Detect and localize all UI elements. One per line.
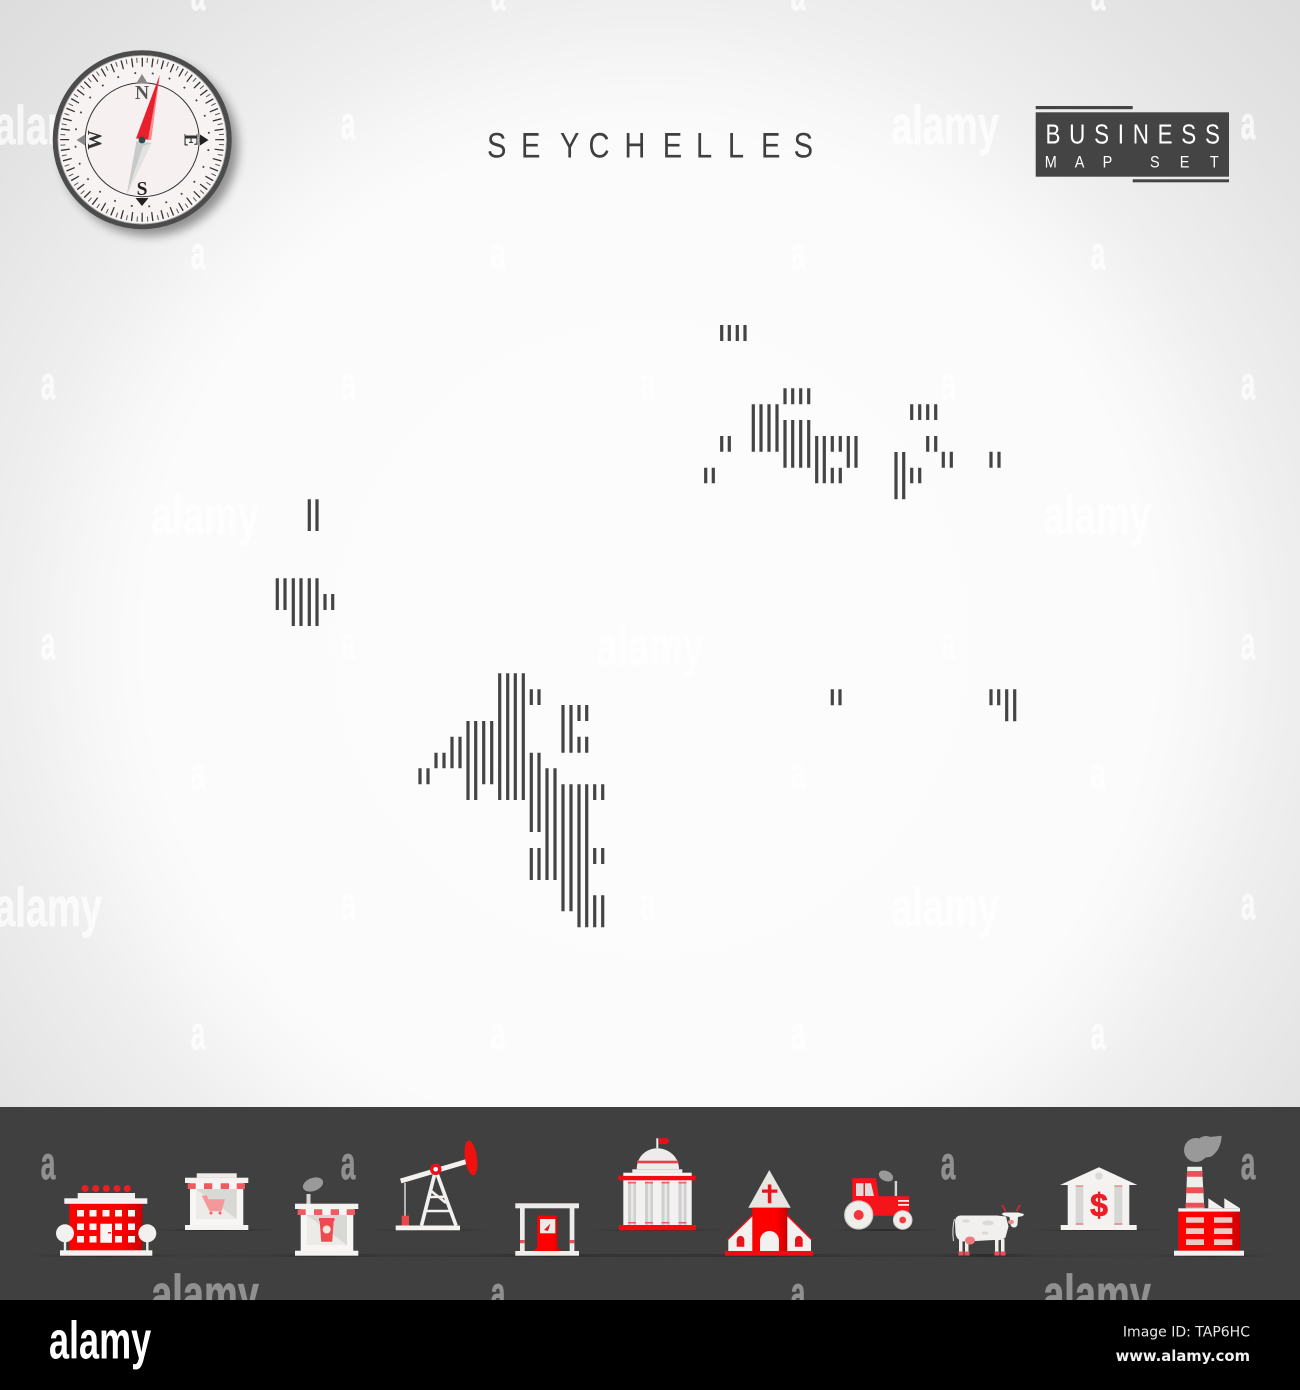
islands: Mahe group north	[706, 388, 856, 483]
compass letters: N	[135, 83, 149, 104]
watermarks on light background: a	[791, 1007, 806, 1059]
watermarks on light background: a	[1241, 877, 1256, 929]
icon: oil pump	[396, 1140, 479, 1230]
icon: factory	[1174, 1136, 1244, 1256]
compass letters: S	[137, 179, 148, 200]
title: SEYCHELLES	[487, 126, 813, 165]
watermarks on dark band: a	[341, 1137, 356, 1189]
watermarks on light background: a	[1091, 1007, 1106, 1059]
watermarks on dark band: a	[1241, 1137, 1256, 1189]
watermarks on light background: a	[1241, 97, 1256, 149]
watermarks on light background: a	[341, 877, 356, 929]
watermarks on dark band: a	[491, 1267, 506, 1319]
black attribution strip	[0, 1300, 1300, 1390]
watermarks on light background: alamy	[891, 877, 999, 939]
watermarks on light background: a	[941, 617, 956, 669]
icon row	[56, 1136, 1244, 1256]
watermarks on light background: a	[491, 227, 506, 279]
watermarks on light background: a	[341, 357, 356, 409]
watermarks on light background: alamy	[1043, 485, 1151, 547]
watermarks on light background: a	[791, 227, 806, 279]
island: northern islet	[722, 325, 745, 341]
compass cardinal triangles	[76, 74, 208, 206]
watermarks on dark band: a	[41, 1137, 56, 1189]
watermarks on light background: a	[191, 1007, 206, 1059]
icon: coffee shop	[295, 1175, 358, 1256]
watermarks on light background	[0, 0, 1256, 1059]
islands: western group	[277, 499, 333, 626]
watermarks on light background: a	[491, 747, 506, 799]
footer dark band	[0, 1107, 1300, 1300]
striped map of Seychelles	[277, 325, 1015, 927]
watermarks on light background: a	[1241, 617, 1256, 669]
watermarks on light background: a	[41, 617, 56, 669]
badge subheading: MAPSET	[1045, 153, 1219, 172]
watermarks on light background: alamy	[891, 95, 999, 157]
islands: north-east group	[896, 404, 999, 499]
watermarks on light background: a	[641, 357, 656, 409]
icon: tractor	[845, 1168, 912, 1229]
watermarks on light background: a	[191, 747, 206, 799]
watermarks on light background: alamy	[596, 616, 704, 678]
watermarks on light background: a	[341, 617, 356, 669]
watermarks on light background: a	[41, 357, 56, 409]
watermarks on light background: a	[1091, 747, 1106, 799]
background	[0, 0, 1300, 1107]
icon: gas station	[515, 1203, 579, 1256]
watermarks on light background: alamy	[151, 485, 259, 547]
watermarks on light background: a	[491, 1007, 506, 1059]
watermarks on light background: a	[1241, 357, 1256, 409]
icon: government building	[618, 1138, 696, 1230]
watermarks on dark band: alamy	[151, 1264, 259, 1326]
watermarks on light background: a	[941, 357, 956, 409]
badge: business map set	[1036, 106, 1229, 182]
watermarks on light background: a	[641, 877, 656, 929]
icon: cow	[953, 1205, 1024, 1256]
website: www.alamy.com	[1116, 1348, 1250, 1365]
icon: church	[725, 1170, 813, 1256]
image id: Image ID: TAP6HC	[1123, 1325, 1250, 1341]
icon: supermarket	[185, 1173, 248, 1230]
watermarks on dark band	[41, 1137, 1256, 1326]
compass needle	[127, 75, 160, 195]
badge heading: BUSINESS	[1046, 119, 1220, 150]
watermarks on dark band: a	[941, 1137, 956, 1189]
compass inner ring	[85, 83, 199, 197]
compass letters	[85, 83, 200, 200]
compass shadow	[60, 58, 238, 236]
icon: hotel	[56, 1185, 156, 1256]
logo: alamy: alamy	[49, 1311, 151, 1370]
islands: southern main group	[420, 673, 603, 927]
watermarks on dark band: alamy	[1043, 1264, 1151, 1326]
watermarks on light background: a	[341, 97, 356, 149]
watermarks on light background: a	[791, 747, 806, 799]
watermarks on dark band: a	[791, 1267, 806, 1319]
watermarks on light background: a	[191, 227, 206, 279]
islands: eastern group	[832, 689, 1015, 721]
icon: bank	[1060, 1167, 1137, 1230]
compass letters: E	[180, 133, 200, 147]
compass	[55, 53, 238, 236]
compass ticks	[64, 62, 220, 218]
compass bezel	[55, 53, 229, 227]
ground shadows	[0, 1229, 1300, 1257]
compass letters: W	[85, 130, 106, 150]
watermarks on light background: a	[1091, 227, 1106, 279]
icon: bank: $	[1090, 1187, 1108, 1223]
